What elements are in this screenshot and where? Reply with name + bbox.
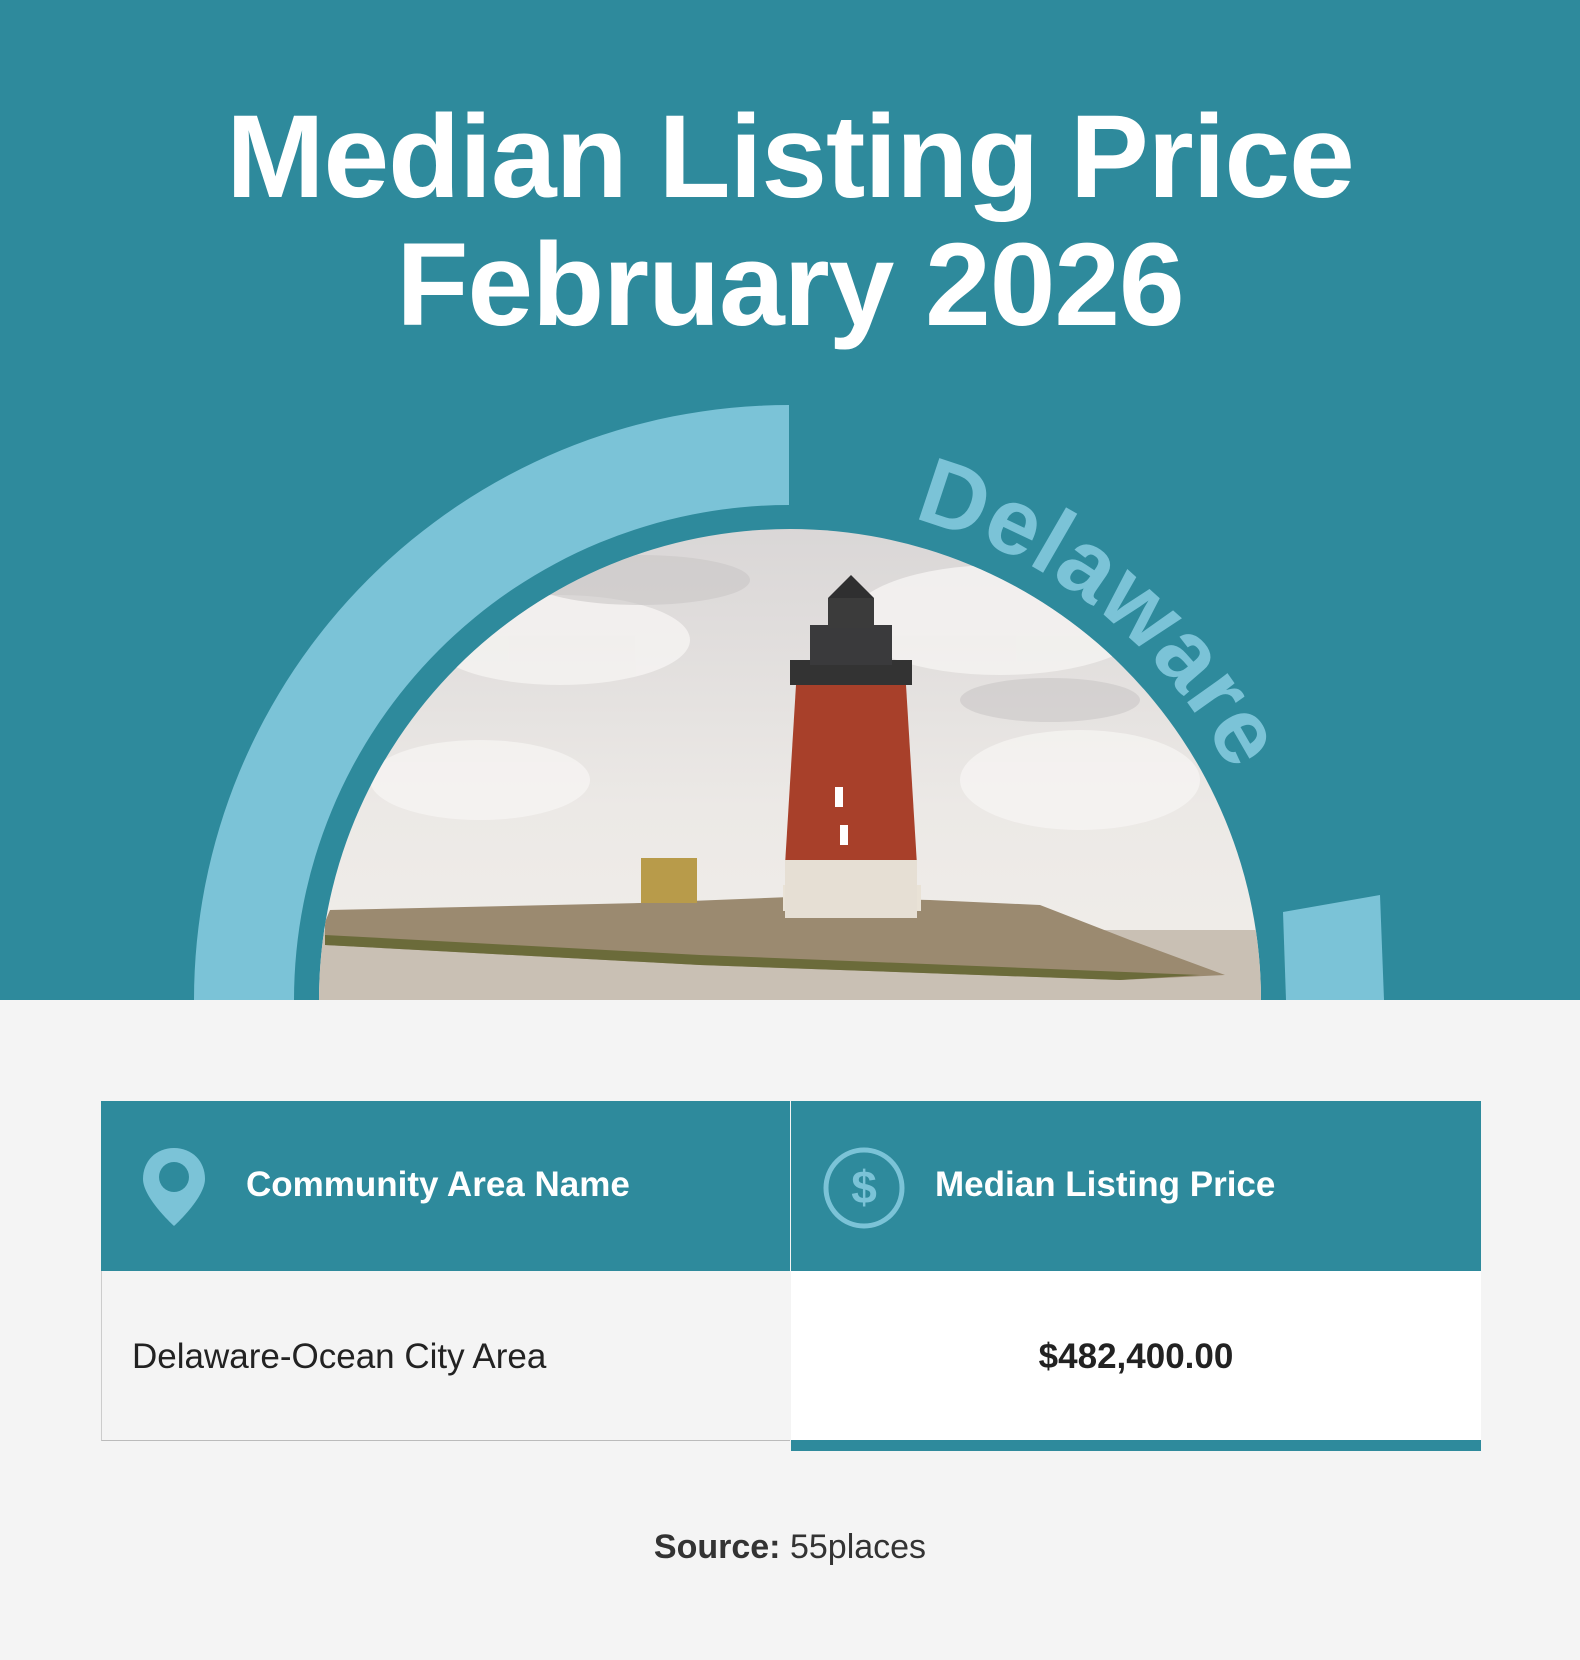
pier [325,897,1225,980]
data table [101,1101,1481,1451]
outer arc right segment [1283,895,1384,1000]
row: price: $482,400.00 [1039,1337,1233,1376]
Delaware curved label: Delaware [919,458,1266,764]
photo: lighthouse [300,520,1280,1000]
icon: dollar coin: $ [851,1161,877,1213]
row: area name [101,1271,790,1441]
icon: map pin [143,1148,205,1226]
header: median listing price [791,1101,1481,1271]
small hut [641,858,697,903]
source: Source: 55places [654,1528,926,1566]
row: price [791,1271,1481,1451]
title [226,91,1354,351]
header background [0,0,1580,1000]
row: area name: Delaware-Ocean City Area [132,1337,546,1376]
outer arc left [194,405,789,1000]
icon: dollar coin [824,1148,904,1228]
header: median listing price: Median Listing Price [935,1165,1275,1204]
lighthouse tower [783,885,921,911]
header: community area name [101,1101,790,1271]
hero graphic: arcs, photo, Delaware label [194,405,1384,1000]
title: February 2026 [396,219,1184,351]
title: Median Listing Price [226,91,1354,223]
header: community area name: Community Area Name [246,1165,630,1204]
